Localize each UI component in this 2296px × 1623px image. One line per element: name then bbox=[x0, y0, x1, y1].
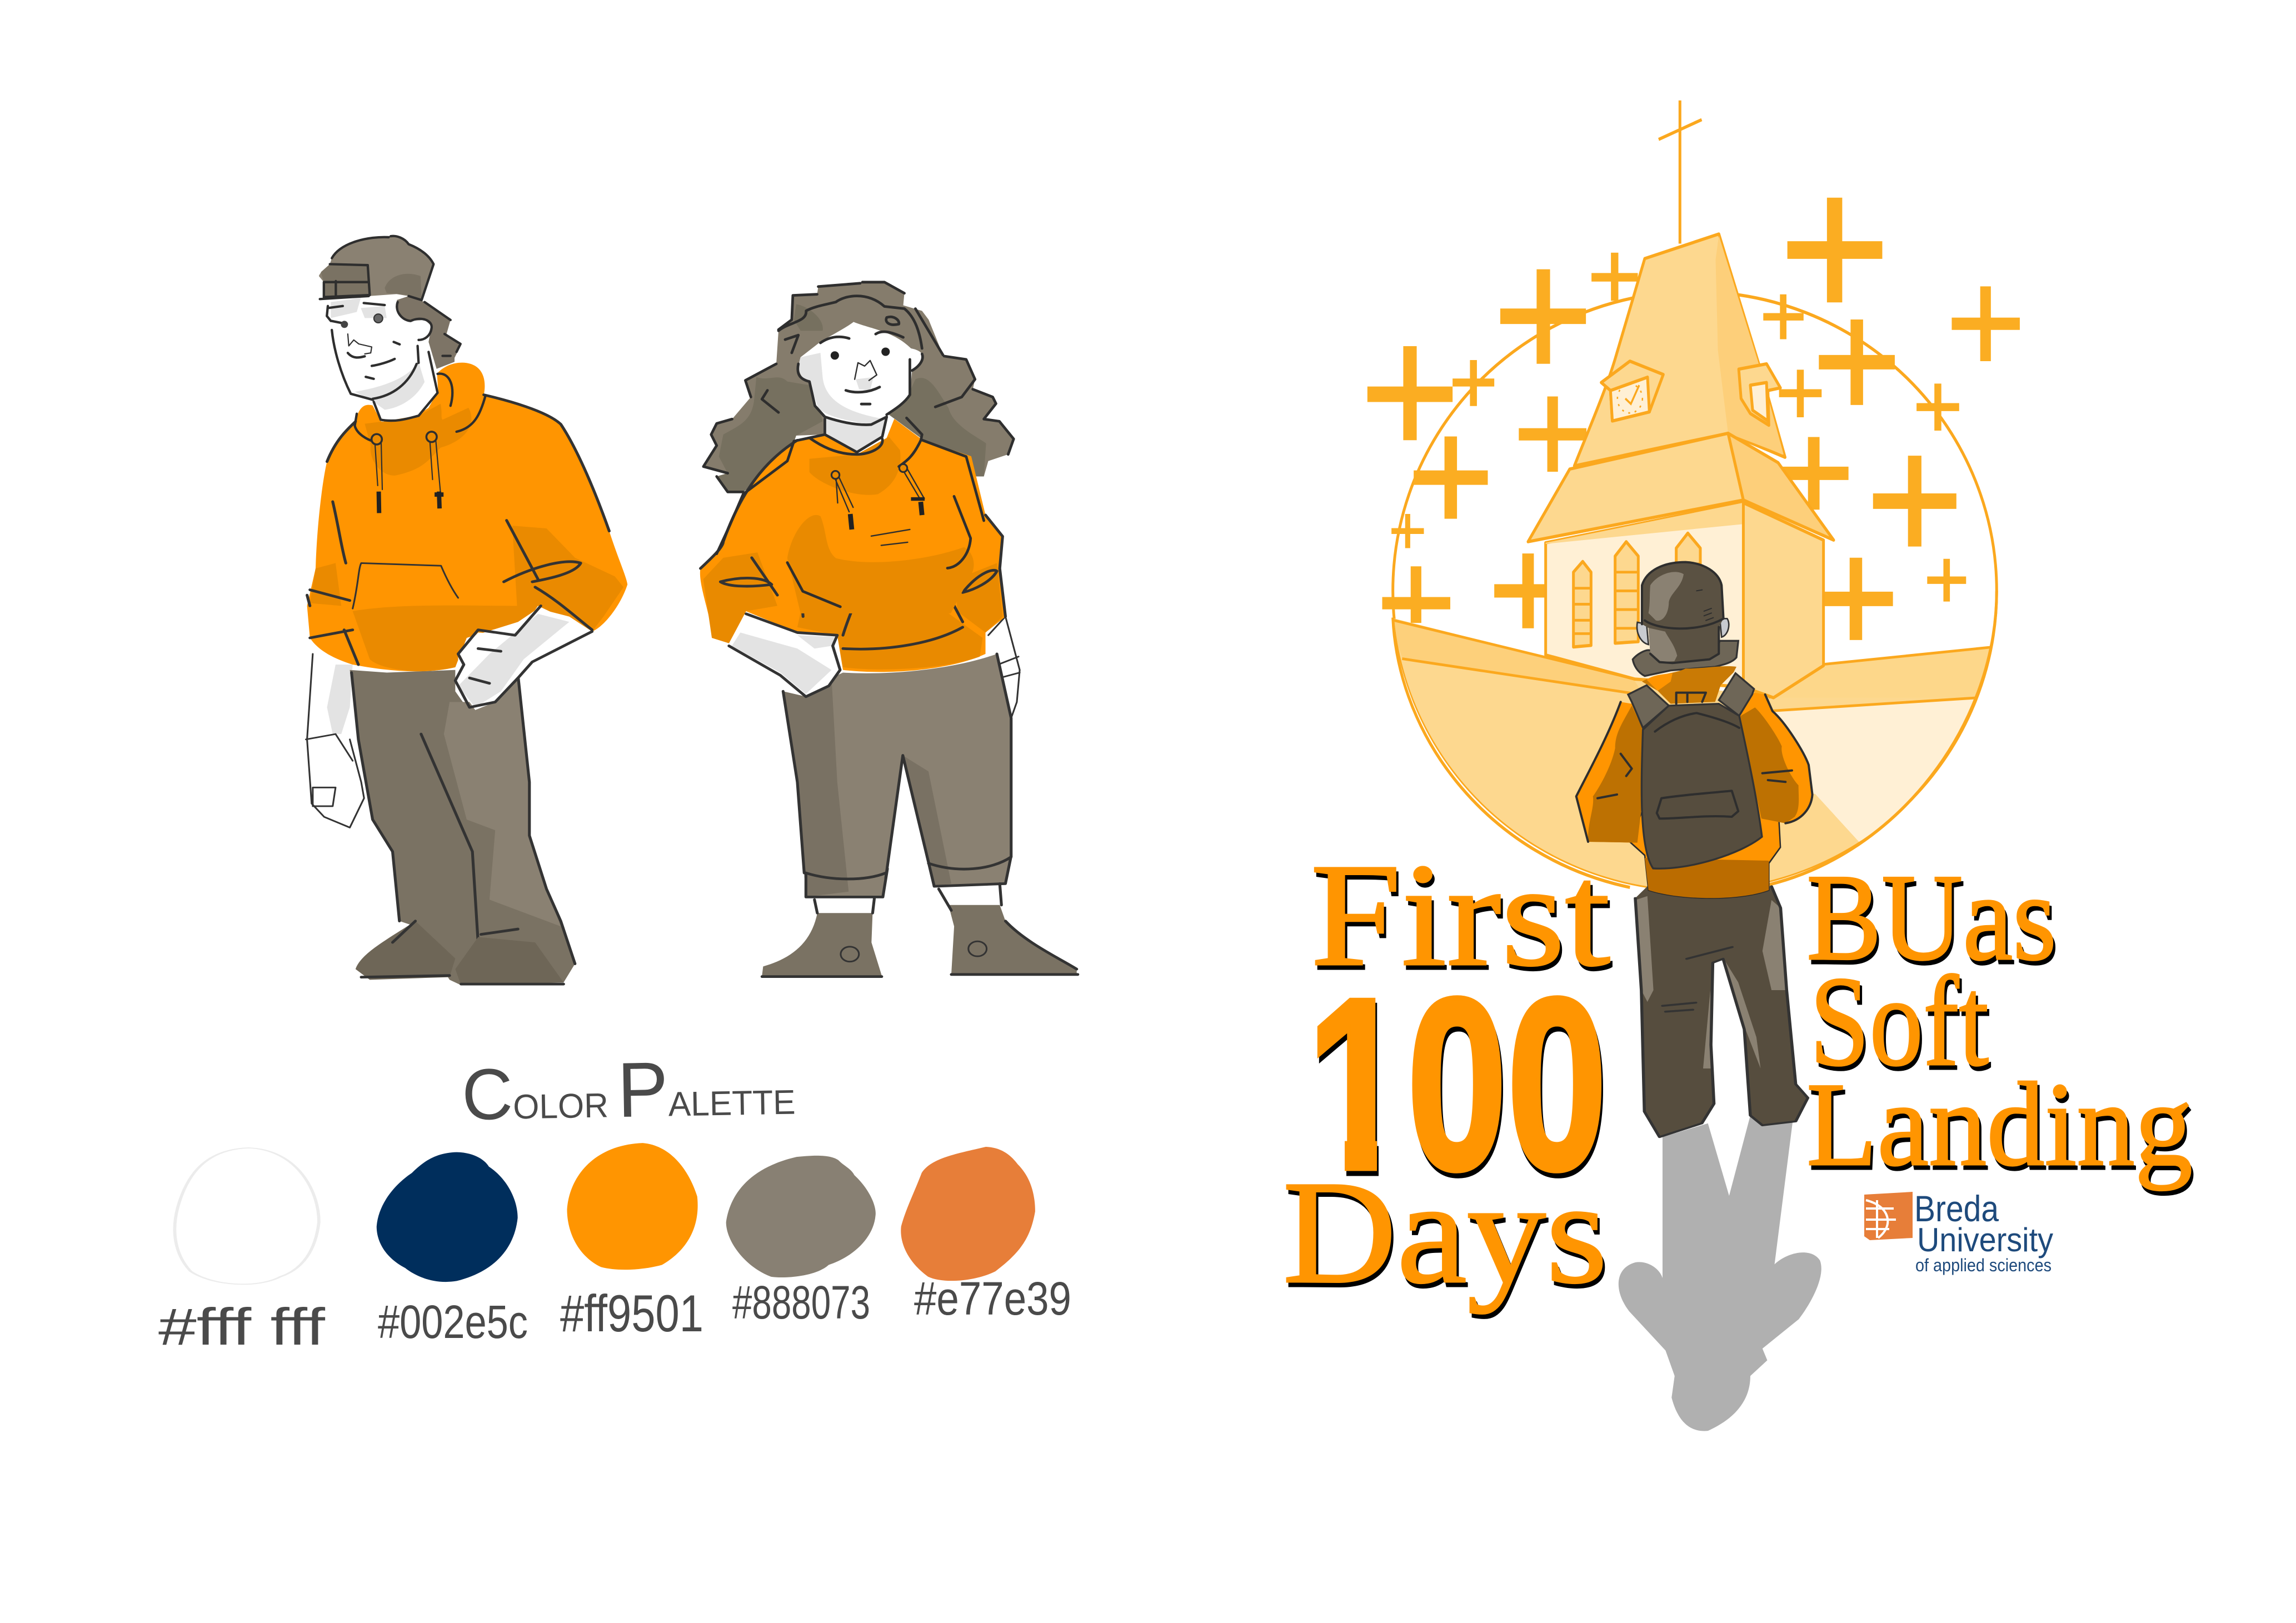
circle outline front bbox=[1393, 591, 1996, 887]
swatch: orange bbox=[567, 1143, 698, 1270]
title: Days: Days bbox=[1282, 1150, 1608, 1314]
roof bbox=[1528, 433, 1743, 542]
sleeves bbox=[1576, 702, 1643, 843]
title: 100: 100 bbox=[1307, 948, 1607, 1221]
curly hair bbox=[703, 282, 1014, 492]
swatch label: navy: #002e5c bbox=[378, 1296, 528, 1348]
logo: Breda University of Applied Sciences bbox=[1864, 1188, 2053, 1275]
logo illustration: church in circle with sparkles bbox=[1367, 101, 2020, 895]
swatch label: orange: #ff9501 bbox=[560, 1284, 703, 1342]
sparkle crosses bbox=[1367, 198, 2020, 640]
ground bbox=[1380, 615, 2000, 895]
orange hood bbox=[1642, 666, 1736, 704]
pants bbox=[350, 670, 575, 985]
top cross bbox=[1659, 101, 1701, 243]
church walls bbox=[1546, 503, 1743, 687]
student shadow bbox=[1619, 1116, 1821, 1431]
hoodie bbox=[307, 363, 627, 671]
student legs bbox=[1635, 886, 1808, 1137]
female face and hoodie shading bbox=[717, 322, 984, 613]
pants bbox=[783, 654, 1011, 897]
palette swatches bbox=[174, 1143, 1035, 1284]
subtitle: Soft: Soft bbox=[1810, 950, 1989, 1093]
backpack bbox=[1641, 704, 1762, 868]
title: First: First bbox=[1310, 833, 1611, 997]
hoodie body and waistband bbox=[1630, 805, 1780, 898]
spire bbox=[1574, 234, 1785, 466]
character: female student in orange hoodie bbox=[700, 282, 1078, 977]
shoes bbox=[762, 905, 1077, 976]
swatch: white bbox=[174, 1148, 319, 1284]
swatch: navy bbox=[377, 1152, 518, 1282]
male head and cap bbox=[319, 236, 486, 513]
character: male student in orange hoodie bbox=[306, 236, 627, 985]
swatch: warm gray bbox=[726, 1156, 876, 1277]
hood collar bbox=[1633, 641, 1738, 676]
ears bbox=[1637, 618, 1729, 645]
subtitle: BUas: BUas bbox=[1806, 848, 2057, 986]
logo mark bbox=[1864, 1192, 1913, 1240]
hoodie drawstrings bbox=[375, 437, 441, 493]
left arm bbox=[307, 654, 364, 827]
clock front bbox=[1601, 361, 1663, 421]
backpack straps bbox=[1628, 673, 1754, 728]
color palette title: COLOR PALETTE bbox=[461, 1043, 796, 1136]
female forearm and hand bbox=[729, 614, 840, 697]
logo text bbox=[1914, 1188, 2053, 1275]
logo text: University bbox=[1917, 1221, 2053, 1259]
clock side bbox=[1739, 364, 1780, 425]
right wrist and watch bbox=[989, 617, 1020, 718]
swatch label: warm gray: #888073 bbox=[732, 1276, 870, 1329]
student torso seen from behind bbox=[1576, 562, 1813, 898]
shoes bbox=[356, 921, 563, 985]
logo text: of applied sciences bbox=[1915, 1255, 2052, 1275]
circle outline bbox=[1393, 292, 1996, 890]
church windows bbox=[1574, 533, 1700, 647]
swatch label: burnt orange: #e77e39 bbox=[914, 1272, 1071, 1325]
swatch label: white: #fff fff bbox=[158, 1297, 326, 1356]
hoodie bbox=[700, 419, 1005, 672]
forearm and hand bbox=[458, 606, 592, 710]
cap dome bbox=[1642, 562, 1724, 663]
subtitle: Landing: Landing bbox=[1806, 1058, 2193, 1191]
logo text: Breda bbox=[1914, 1188, 1999, 1229]
swatch: burnt orange bbox=[901, 1147, 1035, 1281]
